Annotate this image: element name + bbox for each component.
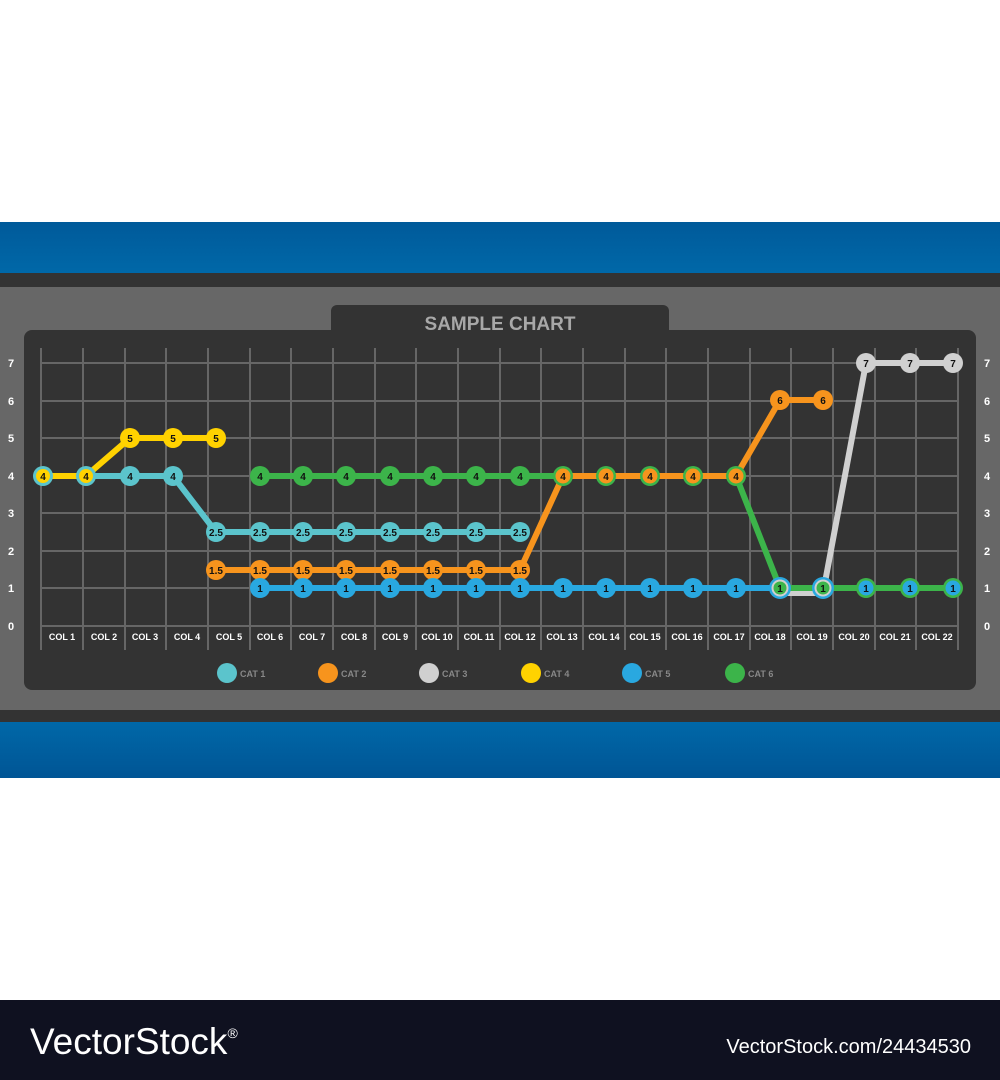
data points: 4	[387, 472, 393, 483]
legend: CAT 2	[341, 669, 366, 679]
top blue band	[0, 222, 1000, 273]
chart panel	[24, 330, 976, 690]
data points: 5	[213, 434, 219, 445]
data points: 4	[517, 472, 523, 483]
data points: 2.5	[383, 528, 397, 539]
data points: 4	[430, 472, 436, 483]
data points	[33, 353, 963, 599]
data points: 1.5	[253, 566, 267, 577]
data points: 1	[430, 584, 436, 595]
data points: 4	[127, 472, 133, 483]
footer: VectorStock.com/24434530	[726, 1036, 971, 1058]
x axis labels: COL 8	[341, 632, 367, 642]
data points: 2.5	[513, 528, 527, 539]
x axis labels: COL 3	[132, 632, 158, 642]
y axis labels	[8, 358, 991, 633]
footer: VectorStock	[30, 1021, 227, 1062]
y axis labels: 6	[8, 396, 14, 408]
data points: 1	[517, 584, 523, 595]
data points: 2.5	[426, 528, 440, 539]
x axis labels: COL 5	[216, 632, 242, 642]
y axis labels: 2	[984, 546, 990, 558]
data points: 4	[560, 472, 566, 483]
data points: 1.5	[383, 566, 397, 577]
data points: 6	[820, 396, 826, 407]
data points: 4	[83, 472, 89, 483]
data points: 6	[777, 396, 783, 407]
x axis labels: COL 21	[879, 632, 911, 642]
data points: 4	[603, 472, 609, 483]
x axis labels: COL 12	[504, 632, 536, 642]
legend: CAT 1	[240, 669, 265, 679]
data points: 1.5	[426, 566, 440, 577]
x axis labels: COL 14	[588, 632, 620, 642]
data points: 4	[40, 472, 46, 483]
data points: 1	[950, 584, 956, 595]
data points: 4	[647, 472, 653, 483]
data points: 2.5	[209, 528, 223, 539]
series lines	[43, 363, 953, 593]
x axis labels: COL 13	[546, 632, 578, 642]
data points: 1.5	[513, 566, 527, 577]
title tab: SAMPLE CHART	[425, 314, 576, 335]
data points: 7	[907, 359, 913, 370]
x axis labels: COL 7	[299, 632, 325, 642]
data points: 1	[863, 584, 869, 595]
x axis labels	[49, 632, 953, 642]
data points: 2.5	[253, 528, 267, 539]
x axis labels: COL 18	[754, 632, 786, 642]
data points: 1	[733, 584, 739, 595]
data points: 4	[733, 472, 739, 483]
data points: 1	[690, 584, 696, 595]
data points: 1	[560, 584, 566, 595]
x axis labels: COL 17	[713, 632, 745, 642]
data points: 4	[690, 472, 696, 483]
legend: CAT 5	[645, 669, 670, 679]
y axis labels: 5	[8, 433, 14, 445]
data points: 4	[343, 472, 349, 483]
x axis labels: COL 19	[796, 632, 828, 642]
data points: 1.5	[296, 566, 310, 577]
data points: 1	[820, 584, 826, 595]
legend: CAT 6	[748, 669, 773, 679]
data points: 1	[647, 584, 653, 595]
legend	[217, 663, 773, 683]
x axis labels: COL 10	[421, 632, 453, 642]
data points: 4	[170, 472, 176, 483]
x axis labels: COL 16	[671, 632, 703, 642]
y axis labels: 4	[8, 471, 15, 483]
data points: 1	[387, 584, 393, 595]
grey background panel	[0, 287, 1000, 710]
data points: 7	[950, 359, 956, 370]
data points: 2.5	[296, 528, 310, 539]
data points: 5	[170, 434, 176, 445]
x axis labels: COL 22	[921, 632, 953, 642]
x axis labels: COL 1	[49, 632, 75, 642]
data points: 2.5	[339, 528, 353, 539]
data points: 1	[300, 584, 306, 595]
data points: 1	[257, 584, 263, 595]
data points: 7	[863, 359, 869, 370]
footer: ®	[227, 1025, 238, 1041]
data points: 4	[473, 472, 479, 483]
data points: 1.5	[469, 566, 483, 577]
data points: 1	[603, 584, 609, 595]
x axis labels: COL 2	[91, 632, 117, 642]
data points: 2.5	[469, 528, 483, 539]
data points: 1	[777, 584, 783, 595]
y axis labels: 7	[8, 358, 14, 370]
y axis labels: 1	[8, 583, 14, 595]
x axis labels: COL 20	[838, 632, 870, 642]
y axis labels: 3	[8, 508, 14, 520]
x axis labels: COL 15	[629, 632, 661, 642]
y axis labels: 3	[984, 508, 990, 520]
y axis labels: 1	[984, 583, 990, 595]
data points: 1	[907, 584, 913, 595]
y axis labels: 7	[984, 358, 990, 370]
x axis labels: COL 9	[382, 632, 408, 642]
y axis labels: 6	[984, 396, 990, 408]
legend: CAT 3	[442, 669, 467, 679]
data points: 1.5	[339, 566, 353, 577]
y axis labels: 0	[984, 621, 990, 633]
footer	[0, 1000, 1000, 1080]
data points: 4	[257, 472, 263, 483]
data points: 1	[473, 584, 479, 595]
y axis labels: 4	[984, 471, 991, 483]
data points: 1	[343, 584, 349, 595]
x axis labels: COL 6	[257, 632, 283, 642]
bottom blue band	[0, 722, 1000, 778]
y axis labels: 2	[8, 546, 14, 558]
data points: 5	[127, 434, 133, 445]
legend: CAT 4	[544, 669, 569, 679]
y axis labels: 5	[984, 433, 990, 445]
data points: 1.5	[209, 566, 223, 577]
y axis labels: 0	[8, 621, 14, 633]
x axis labels: COL 4	[174, 632, 200, 642]
title tab	[331, 305, 669, 345]
data points: 4	[300, 472, 306, 483]
x axis labels: COL 11	[464, 632, 494, 642]
